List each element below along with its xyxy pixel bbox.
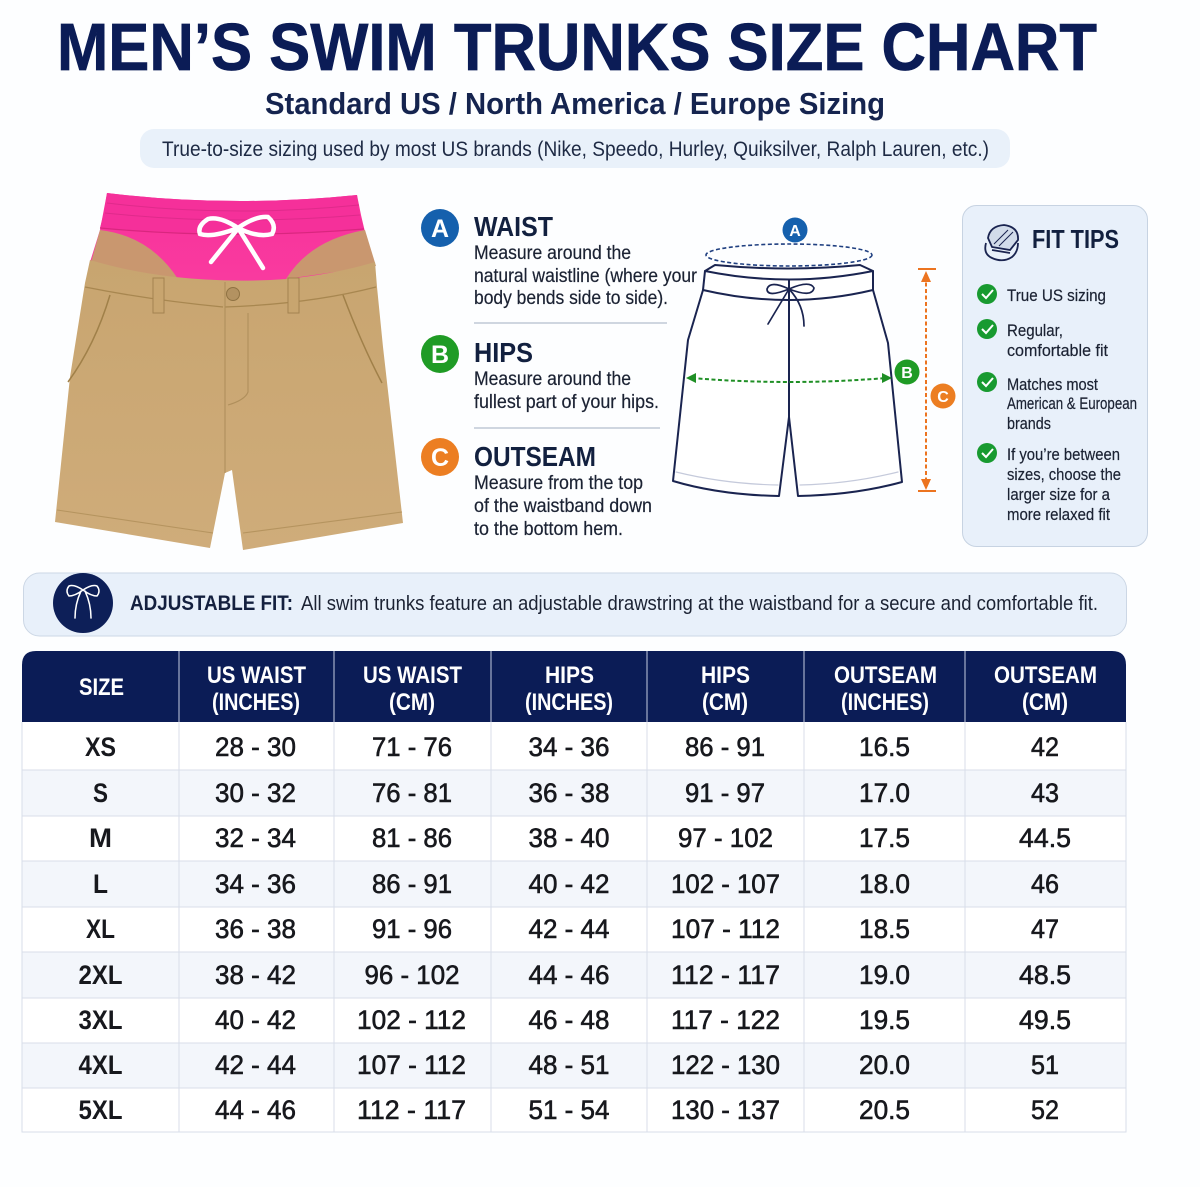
text: waist instructions: Measure around the — [474, 243, 631, 264]
row: M: 81 - 86 — [372, 823, 452, 853]
pink swim trunks — [90, 193, 375, 290]
row: 5XL: 130 - 137 — [671, 1095, 780, 1125]
row: XS: 42 — [1031, 732, 1059, 762]
text: hips instructions: Measure around the — [474, 369, 631, 390]
heading: fit tips: FIT TIPS — [1032, 224, 1119, 254]
icon: drawstring bow — [53, 573, 113, 633]
row: 2XL: 44 - 46 — [528, 960, 610, 990]
row: 3XL: 19.5 — [859, 1005, 910, 1035]
text: outseam instructions — [474, 473, 652, 540]
row: S: 17.0 — [859, 778, 910, 808]
tip: regular fit — [977, 319, 1108, 360]
table header: OUTSEAM — [834, 662, 937, 689]
text: waist instructions: natural waistline (where your — [474, 266, 698, 287]
tip: between sizes: If you’re between — [1007, 446, 1120, 464]
row: 4XL: 42 - 44 — [215, 1050, 296, 1080]
row: M: 32 - 34 — [215, 823, 296, 853]
shorts outline — [673, 265, 902, 496]
table header — [22, 651, 1126, 722]
row: 4XL — [78, 1050, 1059, 1080]
row: XL: XL — [86, 914, 115, 944]
row: 2XL: 38 - 42 — [215, 960, 296, 990]
row: 5XL: 20.5 — [859, 1095, 910, 1125]
tip: matches brands — [977, 372, 1137, 433]
measure: hips — [421, 335, 659, 413]
row: XL: 91 - 96 — [372, 914, 452, 944]
row: 2XL: 96 - 102 — [364, 960, 460, 990]
row: M: 97 - 102 — [678, 823, 773, 853]
row: 3XL: 46 - 48 — [528, 1005, 610, 1035]
row: XL: 36 - 38 — [215, 914, 296, 944]
tip: between sizes — [977, 443, 1121, 524]
row: 5XL: 51 - 54 — [528, 1095, 610, 1125]
khaki shorts — [55, 260, 403, 550]
row: 3XL: 49.5 — [1019, 1005, 1071, 1035]
icon: C marker: C — [937, 389, 949, 406]
row: 5XL: 5XL — [78, 1095, 122, 1125]
measure: waist — [421, 209, 698, 309]
row: S: 36 - 38 — [528, 778, 610, 808]
row: M: M — [89, 823, 112, 853]
table header: HIPS — [545, 662, 594, 689]
diagram: swim trunks measurement outline — [673, 218, 956, 496]
row: XS: XS — [85, 732, 116, 762]
icon: C badge: C — [431, 444, 449, 472]
text: outseam instructions: to the bottom hem. — [474, 519, 623, 540]
row: XL: 107 - 112 — [671, 914, 780, 944]
row: 4XL: 51 — [1031, 1050, 1059, 1080]
row: 2XL: 112 - 117 — [671, 960, 780, 990]
row: 2XL: 48.5 — [1019, 960, 1071, 990]
tip: matches brands: American & European — [1007, 395, 1137, 413]
row: L — [93, 869, 1059, 899]
heading: hips: HIPS — [474, 337, 533, 368]
row: 3XL — [78, 1005, 1071, 1035]
row: S: 43 — [1031, 778, 1059, 808]
row: XS: 34 - 36 — [528, 732, 610, 762]
icon: C marker — [930, 384, 956, 408]
text: adjustable fit note: All swim trunks feature an adjustable drawstring at the waistband for a secure and comfortable fit. — [301, 593, 1098, 615]
row: S: 76 - 81 — [372, 778, 452, 808]
tip: between sizes: sizes, choose the — [1007, 466, 1121, 484]
waist measure ellipse — [706, 244, 872, 266]
row: L: 46 — [1031, 869, 1059, 899]
tip: true us sizing — [977, 284, 1106, 305]
row: L: L — [93, 869, 108, 899]
icon: B marker: B — [901, 365, 913, 382]
row: 4XL: 48 - 51 — [528, 1050, 610, 1080]
row: XS: 16.5 — [859, 732, 910, 762]
measure: outseam — [421, 438, 652, 540]
row: L: 86 - 91 — [372, 869, 452, 899]
icon: folded trunks — [985, 225, 1018, 260]
table header: US WAIST — [363, 662, 462, 689]
row: M: 44.5 — [1019, 823, 1071, 853]
row: 5XL — [78, 1095, 1059, 1125]
row: 4XL: 4XL — [78, 1050, 122, 1080]
row: 3XL: 3XL — [78, 1005, 122, 1035]
row: 3XL: 40 - 42 — [215, 1005, 296, 1035]
row: S — [93, 778, 1059, 808]
row: M — [89, 823, 1071, 853]
table header: (CM) — [389, 689, 435, 716]
banner: adjustable fit — [24, 573, 1126, 636]
row: S: 91 - 97 — [685, 778, 765, 808]
text: waist instructions — [474, 243, 698, 309]
table row backgrounds — [22, 722, 1126, 1132]
tip: between sizes: more relaxed fit — [1007, 506, 1110, 524]
table header: US WAIST — [207, 662, 306, 689]
tip: true us sizing: True US sizing — [1007, 287, 1106, 305]
tip: between sizes: larger size for a — [1007, 486, 1111, 504]
table header: (INCHES) — [841, 689, 929, 716]
banner: sizing note — [140, 129, 1010, 168]
drawstring — [199, 217, 274, 268]
row: 5XL: 44 - 46 — [215, 1095, 296, 1125]
text: hips instructions: fullest part of your hips. — [474, 392, 659, 413]
hips measure arrow — [686, 373, 892, 383]
row: M: 38 - 40 — [528, 823, 610, 853]
tip: matches brands: Matches most — [1007, 376, 1098, 394]
table header: (CM) — [1022, 689, 1068, 716]
row: XL: 47 — [1031, 914, 1059, 944]
icon: C badge — [421, 438, 459, 476]
row: 5XL: 52 — [1031, 1095, 1059, 1125]
row: XS: 28 - 30 — [215, 732, 296, 762]
row: 2XL: 19.0 — [859, 960, 910, 990]
text: hips instructions — [474, 369, 659, 413]
row: L: 40 - 42 — [528, 869, 610, 899]
row: S: 30 - 32 — [215, 778, 296, 808]
row: 2XL — [78, 960, 1071, 990]
row: XS: 71 - 76 — [372, 732, 452, 762]
table header: (INCHES) — [525, 689, 613, 716]
table header: (INCHES) — [212, 689, 300, 716]
icon: A badge — [421, 209, 459, 247]
banner: sizing note: True-to-size sizing used by most US brands (Nike, Speedo, Hurley, Quiksilver, Ralph Lauren, etc.) — [162, 138, 989, 161]
heading: outseam: OUTSEAM — [474, 441, 596, 472]
text: adjustable fit note: ADJUSTABLE FIT: — [130, 592, 293, 615]
table header: SIZE — [79, 674, 124, 701]
photo: khaki shorts over pink swim trunks — [55, 193, 403, 550]
tip: matches brands: brands — [1007, 415, 1051, 433]
row: 4XL: 107 - 112 — [357, 1050, 466, 1080]
row: L: 34 - 36 — [215, 869, 296, 899]
heading: waist: WAIST — [474, 211, 553, 242]
skin — [90, 230, 178, 279]
icon: A badge: A — [431, 215, 449, 243]
tip: regular fit: Regular, — [1007, 322, 1063, 340]
icon: B marker — [894, 360, 920, 384]
row: XS: 86 - 91 — [685, 732, 765, 762]
icon: A marker — [782, 218, 808, 242]
icon: A marker: A — [789, 223, 801, 240]
row: XL — [86, 914, 1059, 944]
row: XL: 42 - 44 — [528, 914, 610, 944]
table header: OUTSEAM — [994, 662, 1097, 689]
text: outseam instructions: Measure from the top — [474, 473, 643, 494]
row: M: 17.5 — [859, 823, 910, 853]
row: L: 102 - 107 — [671, 869, 780, 899]
title: MEN’S SWIM TRUNKS SIZE CHART — [57, 10, 1097, 85]
text: waist instructions: body bends side to side). — [474, 288, 668, 309]
row: XL: 18.5 — [859, 914, 910, 944]
table header: (CM) — [702, 689, 748, 716]
row: 4XL: 20.0 — [859, 1050, 910, 1080]
panel: fit tips — [962, 206, 1148, 546]
row: 3XL: 102 - 112 — [357, 1005, 466, 1035]
subtitle: Standard US / North America / Europe Sizing — [265, 86, 885, 121]
text: outseam instructions: of the waistband down — [474, 496, 652, 517]
row: XS — [85, 732, 1059, 762]
row: 2XL: 2XL — [78, 960, 122, 990]
row: 5XL: 112 - 117 — [357, 1095, 466, 1125]
table header: HIPS — [701, 662, 750, 689]
icon: B badge — [421, 335, 459, 373]
tip: regular fit: comfortable fit — [1007, 342, 1108, 360]
size table — [22, 651, 1126, 1132]
outseam measure arrow — [918, 269, 936, 491]
row: 3XL: 117 - 122 — [671, 1005, 780, 1035]
row: 4XL: 122 - 130 — [671, 1050, 780, 1080]
row: S: S — [93, 778, 108, 808]
icon: B badge: B — [431, 341, 449, 369]
row: L: 18.0 — [859, 869, 910, 899]
